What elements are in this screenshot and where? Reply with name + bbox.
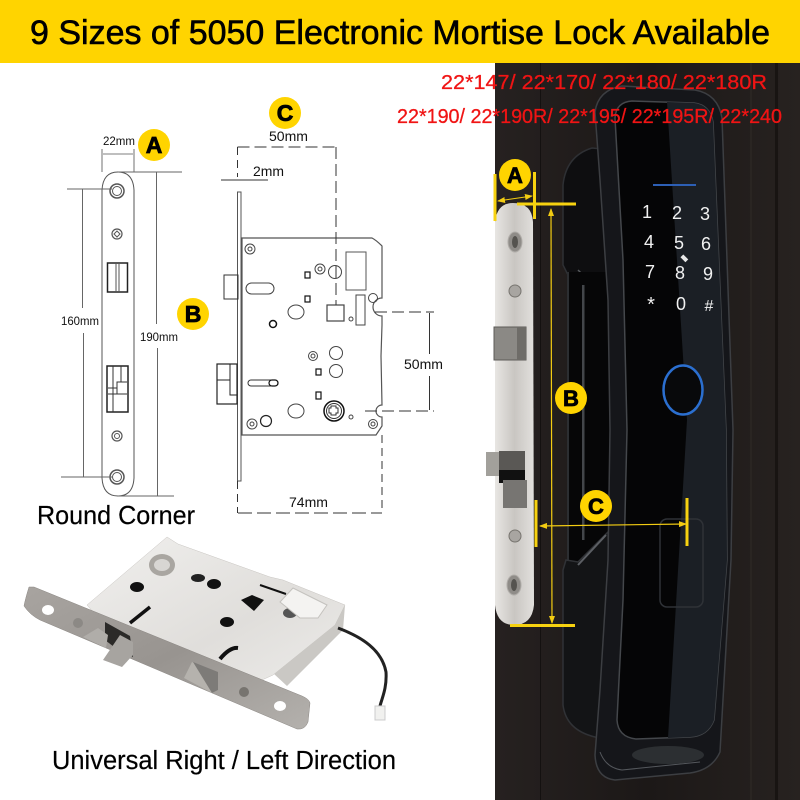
caption: round corner: Round Corner — [37, 500, 195, 530]
caption: universal direction: Universal Right / Left Direction — [52, 747, 396, 775]
back handle lower — [563, 532, 612, 738]
dimension 2mm — [221, 163, 284, 180]
dimension 50mm vertical: 50mm — [404, 356, 443, 372]
dimension C on photo: C — [588, 494, 604, 519]
photo: mortise lock — [24, 537, 386, 729]
dimension 160mm — [61, 189, 112, 477]
dimension 190mm — [118, 172, 182, 496]
dimension A on photo: A — [507, 163, 523, 188]
dimension B on photo — [510, 204, 587, 626]
smart lock body — [595, 86, 733, 780]
badge C — [269, 97, 301, 129]
dimension B on photo: B — [563, 386, 579, 411]
diagram: lock case drawing — [217, 128, 443, 513]
dimension 74mm — [238, 435, 382, 513]
lock faceplate — [24, 587, 310, 729]
keypad — [642, 184, 714, 316]
badge A — [138, 129, 170, 161]
keypad: 8 — [675, 263, 685, 283]
faceplate outline — [102, 172, 134, 496]
keypad: 1 — [642, 202, 652, 222]
badge B — [177, 298, 209, 330]
fingerprint ring — [664, 366, 702, 414]
dimension 190mm: 190mm — [140, 330, 178, 344]
dimension C 50mm: 50mm — [269, 128, 308, 144]
size list text: 22*147/ 22*170/ 22*180/ 22*180R — [441, 71, 767, 94]
case outline — [217, 192, 382, 481]
keypad: 4 — [644, 232, 654, 252]
lock top face — [87, 537, 345, 680]
back handle upper — [563, 148, 612, 305]
title banner: 9 Sizes of 5050 Electronic Mortise Lock Available — [30, 14, 770, 52]
wire and connector — [338, 628, 386, 720]
keypad: * — [647, 294, 655, 316]
keypad: 6 — [701, 234, 711, 254]
dimension A on photo — [495, 159, 534, 221]
dimension C on photo — [536, 490, 687, 547]
keypad: 9 — [703, 264, 713, 284]
dimension 2mm: 2mm — [253, 163, 284, 179]
keypad: 0 — [676, 294, 686, 314]
keypad: 3 — [700, 204, 710, 224]
key cover — [660, 519, 703, 607]
door background — [495, 63, 800, 800]
keypad: 2 — [672, 203, 682, 223]
dimension 22mm: 22mm — [103, 134, 135, 148]
size list text — [397, 71, 782, 128]
diagram: faceplate drawing — [61, 134, 182, 496]
mortise faceplate — [486, 203, 534, 625]
badge B: B — [185, 301, 201, 327]
dimension 50mm vertical — [365, 312, 443, 411]
keypad: 7 — [645, 262, 655, 282]
keypad: # — [705, 298, 714, 315]
title banner — [0, 0, 800, 63]
dimension 74mm: 74mm — [289, 494, 328, 510]
dimension 22mm — [102, 134, 135, 172]
badge C: C — [277, 100, 293, 126]
latch bolts — [83, 622, 218, 693]
size list text: 22*190/ 22*190R/ 22*195/ 22*195R/ 22*240 — [397, 105, 782, 128]
panel: door with smart lock photo — [486, 63, 800, 800]
back handle rails — [567, 272, 612, 568]
dimension 160mm: 160mm — [61, 314, 99, 328]
lock side — [273, 605, 345, 686]
badge A: A — [146, 132, 162, 158]
keypad: 5 — [674, 233, 684, 253]
